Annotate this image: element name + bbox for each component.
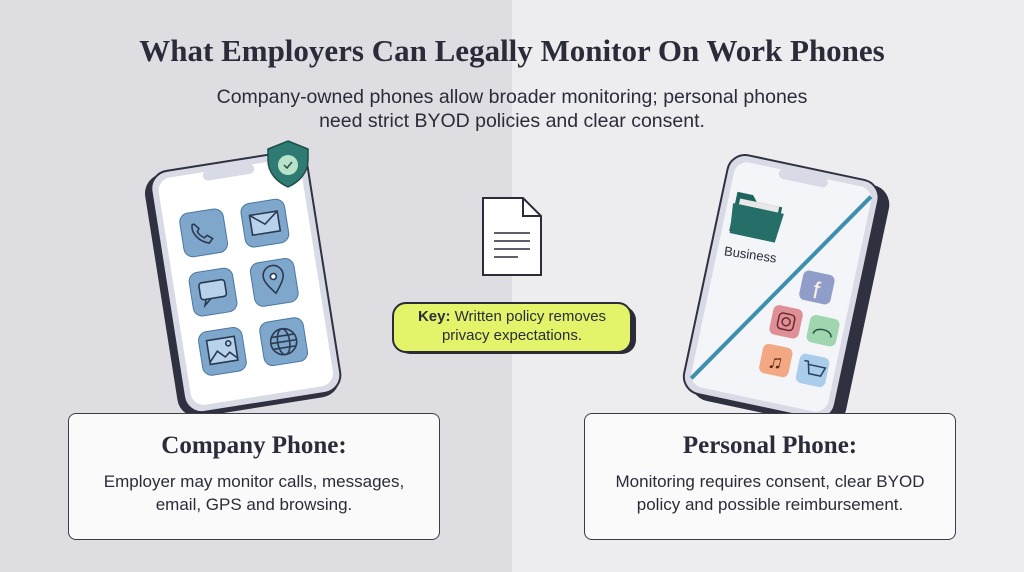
panel: company phone: Company Phone: xyxy=(161,432,347,459)
personal phone illustration: ♫ xyxy=(766,350,785,375)
personal phone illustration: f xyxy=(810,277,823,305)
callout: key xyxy=(396,306,636,354)
panel: company phone: Employer may monitor calls, messages, xyxy=(104,472,404,491)
panel: personal phone: Personal Phone: xyxy=(683,432,857,459)
shield xyxy=(268,141,308,187)
panel: personal phone: Monitoring requires consent, clear BYOD xyxy=(616,472,924,491)
company phone illustration xyxy=(145,140,342,413)
panel: company phone: email, GPS and browsing. xyxy=(156,495,352,514)
title: What Employers Can Legally Monitor On Work Phones xyxy=(139,33,885,68)
text: privacy expectations. xyxy=(442,327,582,344)
panel: personal phone: policy and possible reimbursement. xyxy=(637,495,903,514)
personal phone illustration xyxy=(682,154,890,413)
icon: document xyxy=(482,197,542,276)
text: Key: Written policy removes xyxy=(418,308,606,325)
panel: personal phone xyxy=(584,413,956,540)
subtitle: need strict BYOD policies and clear consent. xyxy=(319,110,705,132)
icon: business folder xyxy=(723,192,784,266)
icon: business folder: Business xyxy=(723,243,778,266)
subtitle xyxy=(217,86,807,132)
panel: company phone xyxy=(68,413,440,540)
subtitle: Company-owned phones allow broader monitoring; personal phones xyxy=(217,86,807,108)
